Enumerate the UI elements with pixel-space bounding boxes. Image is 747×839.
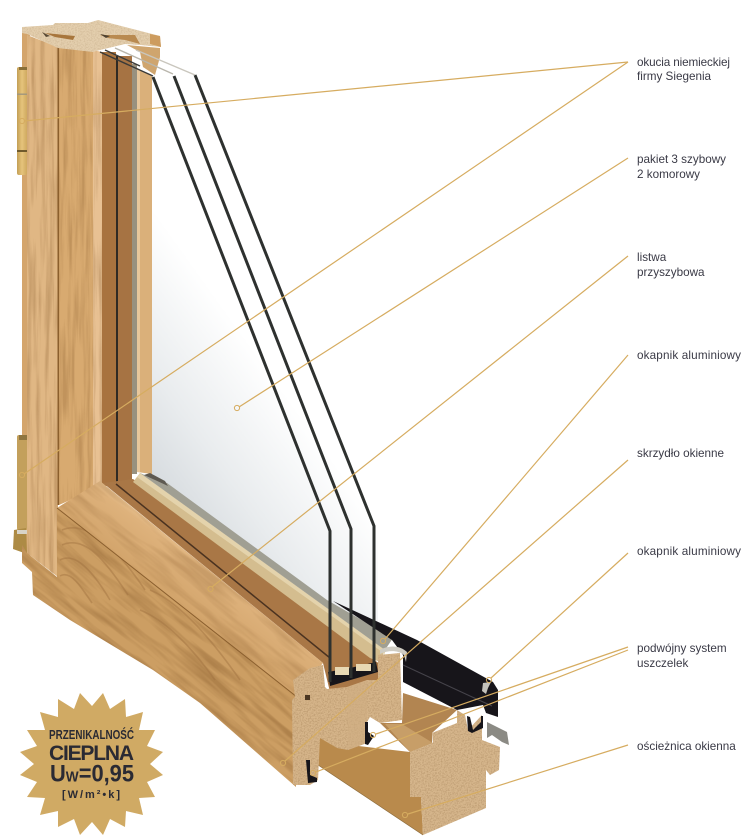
glazing unit panes: [153, 75, 374, 682]
label: uszczelki: podwójny system: [637, 642, 727, 655]
label: ościeżnica: ościeżnica okienna: [637, 740, 736, 753]
line: ościeżnica: [402, 745, 628, 818]
desiccant: [335, 667, 349, 675]
line: okapnik 1: [380, 355, 628, 644]
pane spacers at the top: [100, 48, 195, 76]
beige glazing bead: [133, 473, 385, 662]
leader lines: [19, 62, 628, 818]
label: pakiet: pakiet 3 szybowy: [637, 153, 726, 166]
glass pane: [152, 60, 378, 632]
label: okucia: firmy Siegenia: [637, 70, 712, 83]
badge: thermal transmittance: [20, 693, 163, 835]
frame gasket: [467, 716, 483, 733]
label: pakiet: 2 komorowy: [637, 168, 700, 181]
label: okucia: okucia niemieckiej: [637, 56, 730, 69]
line: uszczelki: [310, 647, 628, 776]
metal drip: [487, 722, 509, 745]
hinge upper: [17, 67, 27, 175]
label: skrzydło: skrzydło okienne: [637, 447, 724, 460]
black aluminium drip cap: [333, 601, 498, 717]
hinge lower: [13, 435, 27, 554]
sash section: [292, 653, 402, 785]
sash boards: [27, 35, 102, 576]
line: okapnik 2: [486, 553, 628, 683]
badge starburst: [20, 693, 163, 835]
sash gaskets: [306, 760, 317, 783]
back frame strip: [22, 27, 30, 563]
label: uszczelki: uszczelek: [637, 657, 688, 670]
badge line 1: PRZENIKALNOŚĆ: [49, 727, 134, 742]
badge unit: [W/m²•k]: [62, 789, 120, 801]
frame section: [410, 710, 500, 835]
label: listwa: listwa: [637, 251, 667, 264]
line: okucia (upper hinge): [19, 62, 628, 124]
frame upper face: [380, 693, 457, 752]
badge line 2: CIEPLNA: [49, 742, 134, 765]
line: okucia (lower hinge): [19, 62, 628, 478]
window photograph: cross-section of timber window: [0, 18, 510, 839]
sash lower face: [22, 508, 297, 787]
interior rebate: [102, 52, 152, 486]
silver end cap: [380, 646, 407, 662]
gasket corner: [144, 473, 168, 486]
glass black base: [328, 662, 378, 686]
label: okapnik 2: okapnik aluminiowy: [637, 545, 741, 558]
badge value: UW=0,95: [50, 760, 134, 788]
sash moulding bar: [57, 481, 323, 697]
grey glazing edge: [140, 473, 393, 650]
line: skrzydło: [280, 460, 628, 766]
line: pakiet: [234, 158, 628, 411]
dark shadow line in rebate: [116, 484, 330, 658]
label: listwa: przyszybowa: [637, 266, 705, 279]
line: listwa: [208, 256, 628, 592]
label: okapnik: okapnik aluminiowy: [637, 349, 741, 362]
lower brown rebate: [103, 479, 385, 692]
end grain top: [20, 18, 163, 75]
frame left face: [315, 735, 423, 835]
